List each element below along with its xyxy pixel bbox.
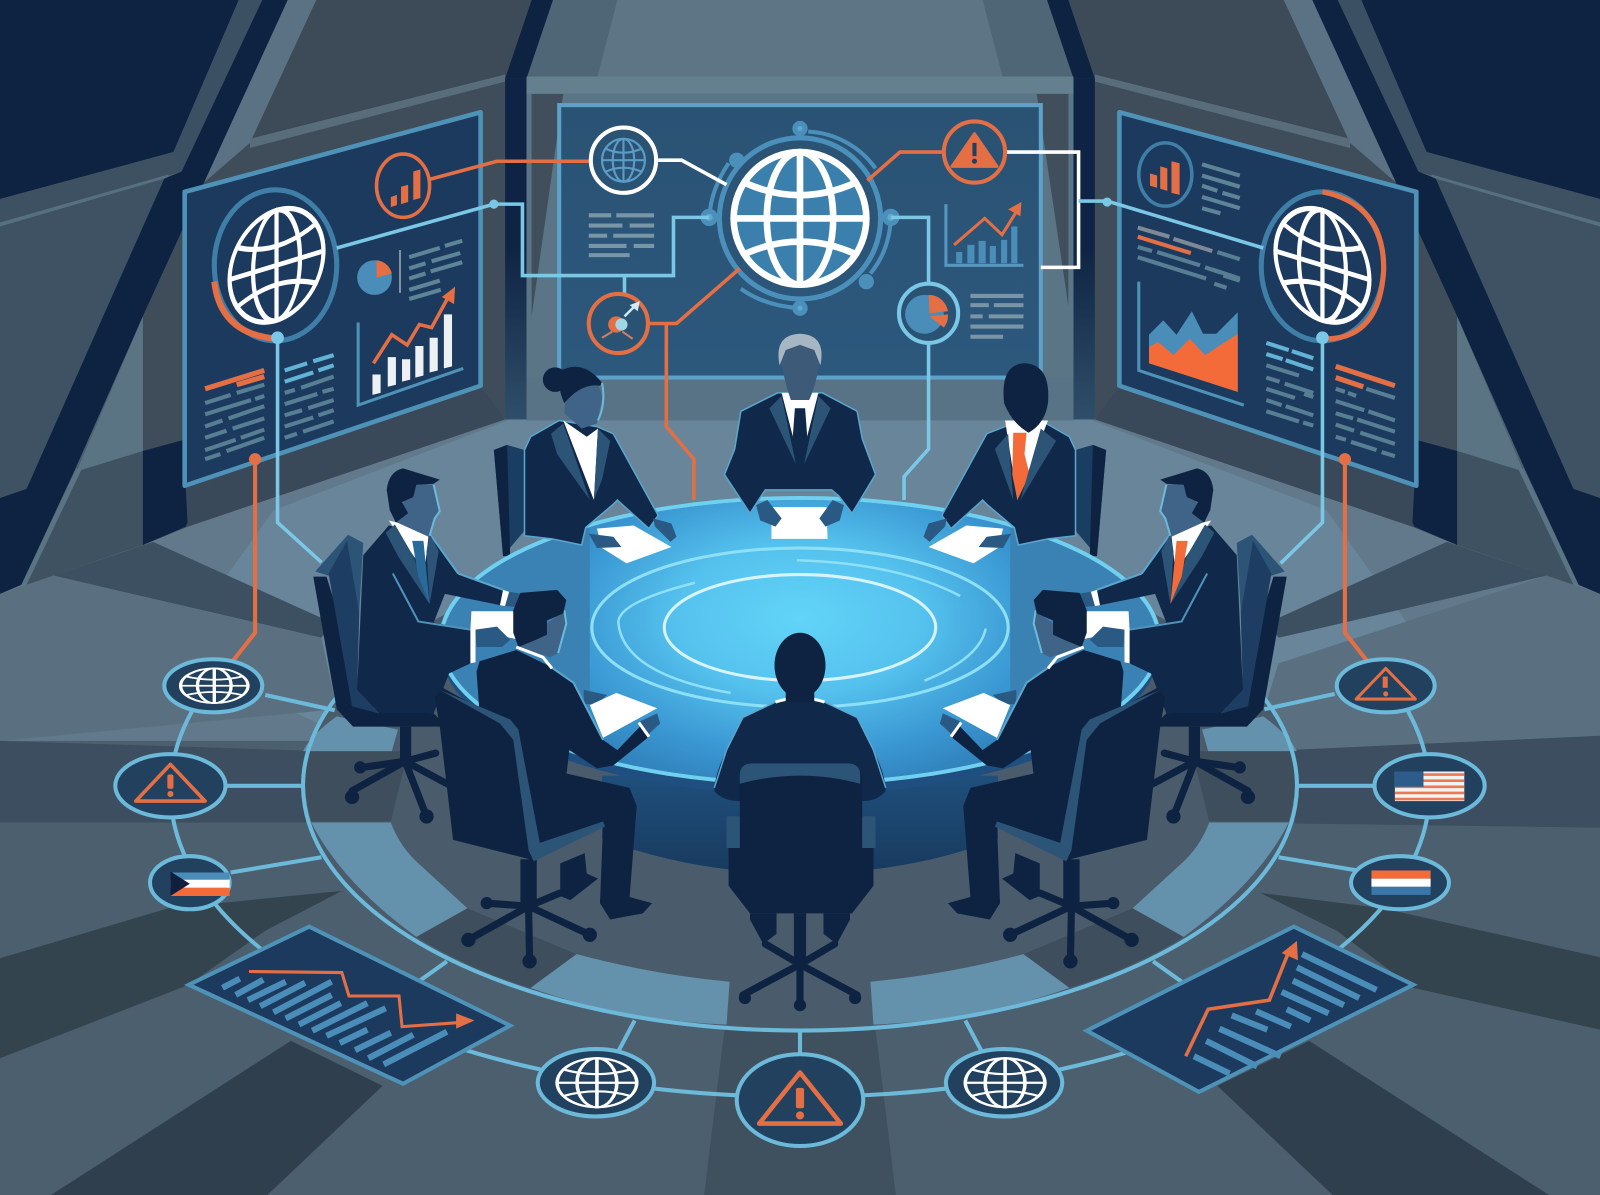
background: ceiling and back wall xyxy=(527,0,1073,420)
floor ring light segments xyxy=(303,716,1297,1025)
node: warning right xyxy=(1337,659,1435,712)
pie chart xyxy=(357,250,400,295)
text block middle xyxy=(1138,228,1240,288)
text block two xyxy=(1336,366,1395,456)
background: room right xyxy=(983,0,1600,594)
panel: left screen xyxy=(185,112,481,486)
person: back left woman xyxy=(524,367,677,548)
icon: small globe node xyxy=(591,128,656,193)
chair xyxy=(727,763,876,1011)
icon: pie node xyxy=(899,284,958,343)
person: front left xyxy=(435,590,660,968)
node: flag left xyxy=(150,856,230,909)
papers on table xyxy=(597,507,1003,563)
panel: center screen xyxy=(559,105,1041,378)
globe rings xyxy=(703,123,897,313)
node: globe left upper xyxy=(164,659,262,712)
node: tricolor flag xyxy=(1351,856,1449,909)
text lines top xyxy=(1202,164,1240,213)
center globe xyxy=(733,151,867,286)
person: right xyxy=(1069,468,1287,824)
node: warning left xyxy=(115,754,226,817)
text lines top right xyxy=(409,241,462,299)
globe with ring xyxy=(214,190,337,341)
small chart xyxy=(946,202,1023,265)
connector: right orange riser xyxy=(1341,455,1367,661)
floor panel: falling chart xyxy=(189,927,510,1084)
background: room left xyxy=(0,0,617,594)
icon: target node xyxy=(589,294,648,353)
connector: right globe down xyxy=(1281,333,1327,563)
node: globe bottom right xyxy=(946,1049,1062,1116)
nodes: ring icons xyxy=(115,659,1485,1146)
table top xyxy=(441,490,1159,796)
text lines right xyxy=(970,296,1023,337)
floor ring outline xyxy=(303,697,1297,1031)
rising bar chart xyxy=(358,287,463,405)
node: globe bottom left xyxy=(538,1049,654,1116)
floor panel: rising chart xyxy=(1087,927,1413,1092)
text block left xyxy=(205,370,264,459)
text lines left xyxy=(589,215,654,255)
person: back right xyxy=(923,363,1076,548)
person: left xyxy=(313,468,531,824)
person: center xyxy=(724,334,876,527)
floor with radial wedges xyxy=(0,419,1600,1195)
floor ring interior xyxy=(303,541,1297,1031)
back left chair xyxy=(494,445,524,556)
table glow xyxy=(590,490,1010,796)
text block one xyxy=(1266,343,1313,426)
person: front right xyxy=(940,590,1165,968)
node: warning bottom xyxy=(737,1054,863,1146)
node network ring and spokes xyxy=(170,680,1430,1097)
node: US flag xyxy=(1374,754,1485,817)
panel: right screen xyxy=(1119,112,1416,486)
floor ring darker parts xyxy=(303,751,1297,988)
table base xyxy=(602,776,998,874)
globe with ring xyxy=(1261,192,1384,341)
icon: bar chart ring xyxy=(1139,143,1192,206)
connector: left orange riser xyxy=(233,455,259,661)
area chart xyxy=(1139,282,1244,405)
connector: left globe down xyxy=(273,333,321,562)
back right chair xyxy=(1076,445,1106,556)
connectors on the screens xyxy=(337,152,1263,500)
icon: warning node xyxy=(944,121,1005,183)
icon: bar chart ring xyxy=(377,154,430,217)
text block right xyxy=(285,355,334,438)
table rings xyxy=(592,548,1008,707)
person: front center with chair xyxy=(714,633,886,1011)
